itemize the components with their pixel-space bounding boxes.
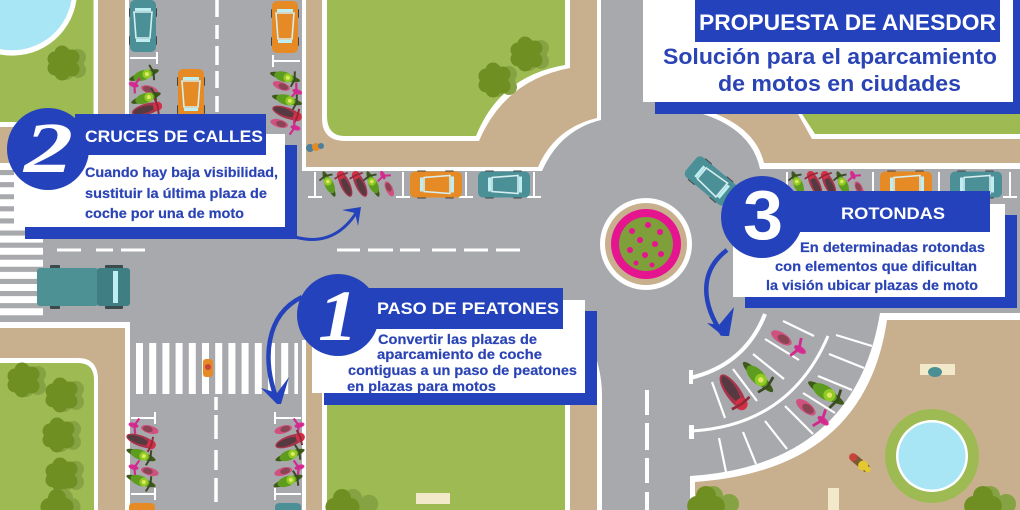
motos: angled parking: [712, 323, 849, 433]
heading: PROPUESTA DE ANESDOR: [699, 10, 996, 35]
block: bottom-right plaza: [687, 313, 1020, 510]
pedestrian: pavement: [306, 143, 324, 152]
body text: [766, 239, 985, 293]
body text: con elementos que dificultan: [775, 258, 977, 274]
title panel: [643, 0, 1020, 114]
van: teal: [37, 265, 130, 309]
number 3: 3: [743, 176, 783, 254]
person walking: [847, 451, 873, 475]
motos: top-right row: [268, 65, 305, 137]
body text: Convertir las plazas de: [378, 331, 537, 347]
body text: contiguas a un paso de peatones: [348, 362, 577, 378]
arrow: rotondas: [706, 250, 734, 336]
car: teal bottom-right: [275, 503, 301, 510]
car: orange top: [271, 1, 299, 53]
arrow: cruces de calles: [295, 207, 361, 239]
car: teal right: [950, 170, 1002, 198]
road markings: [57, 0, 647, 510]
body text: sustituir la última plaza de: [85, 185, 267, 201]
motos: right parking row: [786, 168, 869, 200]
car: orange right: [880, 170, 932, 198]
heading: PASO DE PEATONES: [377, 299, 559, 318]
bench: bottom edge: [828, 488, 839, 510]
car: orange parked: [410, 170, 462, 198]
trees: bottom-right: [687, 486, 1016, 510]
body text: aparcamiento de coche: [377, 346, 542, 362]
heading: CRUCES DE CALLES: [85, 127, 263, 146]
arrow: paso de peatones: [261, 297, 302, 404]
body text: [85, 164, 278, 221]
block: top-right pavement: [703, 114, 1020, 169]
car: teal parked: [478, 170, 530, 198]
body text: En determinadas rotondas: [800, 239, 985, 255]
number 2: 2: [23, 108, 73, 188]
subtitle: Solución para el aparcamiento: [663, 44, 997, 69]
body text: la visión ubicar plazas de moto: [766, 277, 978, 293]
bench: bottom-right: [920, 364, 955, 375]
car: orange driving: [177, 69, 205, 121]
heading: ROTONDAS: [841, 204, 945, 223]
roundabout: [600, 198, 692, 290]
bench: bottom-centre: [416, 493, 450, 504]
body text: Cuando hay baja visibilidad,: [85, 164, 278, 180]
body text: [347, 331, 577, 394]
angled parking lines: [712, 321, 872, 472]
number 1: 1: [318, 276, 358, 356]
motorcycles: [124, 63, 869, 494]
panel: paso de peatones: [297, 274, 597, 405]
person on bench: [928, 367, 942, 377]
car: teal top-left: [129, 0, 157, 52]
trees: top-centre: [478, 36, 549, 98]
block: bottom-left park: [0, 322, 130, 510]
motos: bottom-right row: [271, 416, 307, 494]
crosswalk: bottom: [136, 343, 298, 394]
panel: rotondas: [721, 176, 1017, 308]
motos: bottom-left row: [124, 416, 161, 494]
parking lines: [130, 52, 1017, 500]
block: top-centre park: [302, 0, 601, 171]
motos: centre parking row: [317, 168, 399, 200]
tree: bottom-centre: [325, 489, 378, 510]
pond: top-left: [0, 0, 76, 56]
body text: coche por una de moto: [85, 205, 244, 221]
motos: top-left row: [126, 63, 164, 121]
subtitle: de motos en ciudades: [718, 71, 961, 96]
subtitle: [663, 44, 997, 96]
pedestrian: crosswalk: [203, 359, 213, 377]
pond: bottom-right: [885, 409, 979, 503]
crosswalk: left: [0, 163, 43, 318]
car: orange bottom-left: [129, 503, 155, 510]
parking island curbs: [689, 314, 828, 439]
block: top-left park: [0, 0, 129, 170]
body text: en plazas para motos: [347, 378, 496, 394]
tree: top-left: [48, 46, 86, 80]
block: bottom-centre park: [302, 340, 602, 510]
panel: cruces de calles: [7, 108, 297, 239]
car: teal roundabout: [682, 154, 740, 208]
trees: bottom-left: [8, 362, 84, 510]
